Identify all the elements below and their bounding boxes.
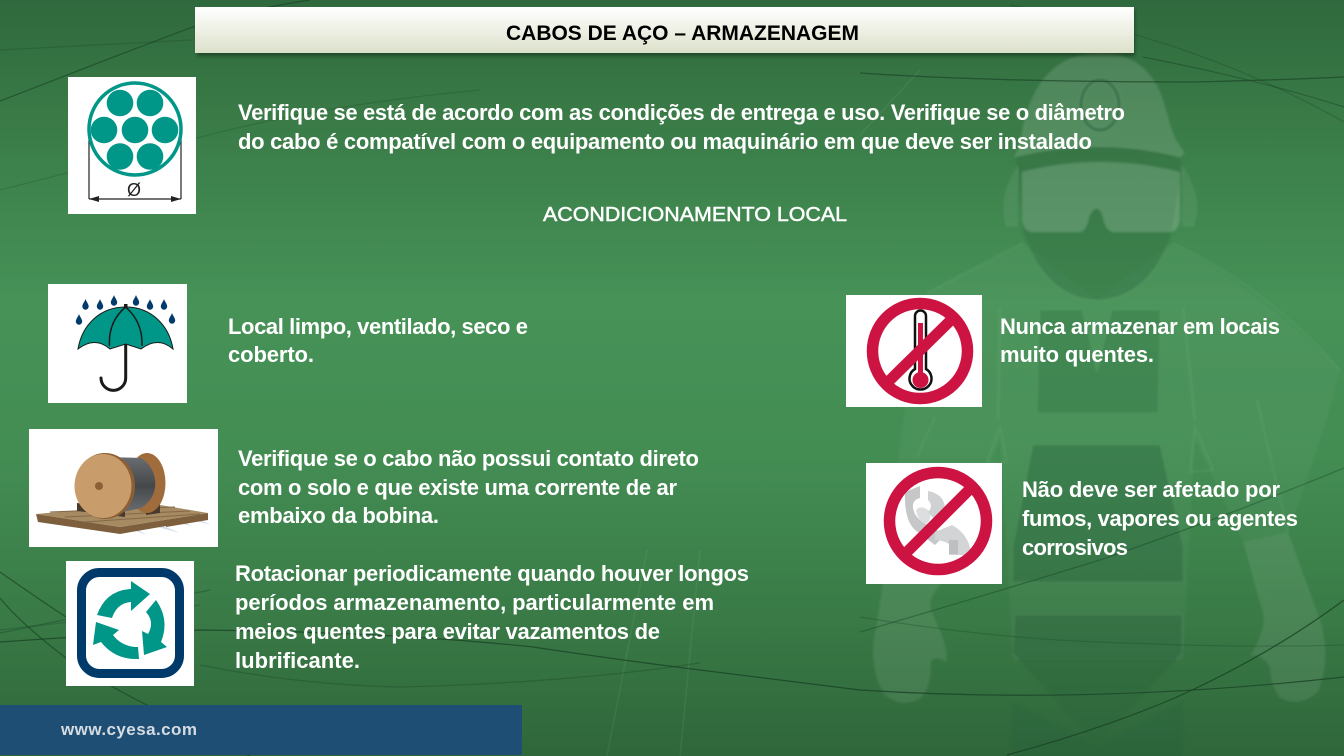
- icon: rotation arrows: [66, 561, 194, 686]
- chest panel: [1037, 310, 1160, 413]
- footer bar: [0, 705, 522, 755]
- icon: cable diameter: [68, 77, 196, 214]
- text: clean location: Local limpo, ventilado, seco e: [228, 314, 528, 339]
- bottom panels: [1012, 702, 1183, 756]
- text: no ground contact: com o solo e que existe uma corrente de ar: [238, 475, 677, 500]
- title bar: [195, 7, 1135, 56]
- background worker silhouette: [873, 53, 1340, 756]
- body tint: [883, 243, 1340, 660]
- text: periodic rotation: [235, 561, 749, 673]
- intro text: Verifique se está de acordo com as condições de entrega e uso. Verifique se o diâmetro: [238, 100, 1125, 125]
- text: fumes warning: corrosivos: [1022, 535, 1128, 560]
- lower shield panel: [1013, 615, 1182, 743]
- waist panel: [1013, 445, 1183, 582]
- face: [1016, 146, 1182, 300]
- text: never hot: [1000, 314, 1280, 367]
- text: clean location: [228, 314, 528, 367]
- text: never hot: Nunca armazenar em locais: [1000, 314, 1280, 339]
- icon: cable diameter: Ø: [127, 180, 141, 200]
- section heading: ACONDICIONAMENTO LOCAL: [543, 203, 847, 226]
- ear muffs: [1003, 165, 1197, 227]
- right glove: [1243, 532, 1325, 702]
- faint light streaks: [607, 70, 920, 756]
- icon: no fumes: [866, 463, 1002, 584]
- text: never hot: muito quentes.: [1000, 342, 1154, 367]
- icon: umbrella in rain: [48, 284, 187, 403]
- left glove: [873, 583, 947, 703]
- title bar: CABOS DE AÇO – ARMAZENAGEM: [506, 22, 859, 45]
- text: periodic rotation: períodos armazenamento, particularmente em: [235, 590, 714, 615]
- text: no ground contact: [238, 446, 699, 528]
- helmet: [1013, 53, 1184, 157]
- body outline: [917, 243, 1340, 532]
- text: no ground contact: embaixo da bobina.: [238, 503, 439, 528]
- footer bar: www.cyesa.com: [60, 720, 197, 739]
- intro text: [238, 100, 1125, 154]
- text: periodic rotation: Rotacionar periodicamente quando houver longos: [235, 561, 749, 586]
- icon: cable reel on pallet: [29, 429, 218, 547]
- text: fumes warning: [1022, 477, 1298, 560]
- text: periodic rotation: lubrificante.: [235, 648, 360, 673]
- text: fumes warning: fumos, vapores ou agentes: [1022, 506, 1298, 531]
- icon: no heat: [846, 295, 982, 407]
- text: periodic rotation: meios quentes para evitar vazamentos de: [235, 619, 660, 644]
- head lamp: [1081, 80, 1119, 130]
- intro text: do cabo é compatível com o equipamento ou maquinário em que deve ser instalado: [238, 129, 1092, 154]
- text: clean location: coberto.: [228, 342, 314, 367]
- text: fumes warning: Não deve ser afetado por: [1022, 477, 1280, 502]
- goggles: [1022, 162, 1180, 232]
- text: no ground contact: Verifique se o cabo não possui contato direto: [238, 446, 699, 471]
